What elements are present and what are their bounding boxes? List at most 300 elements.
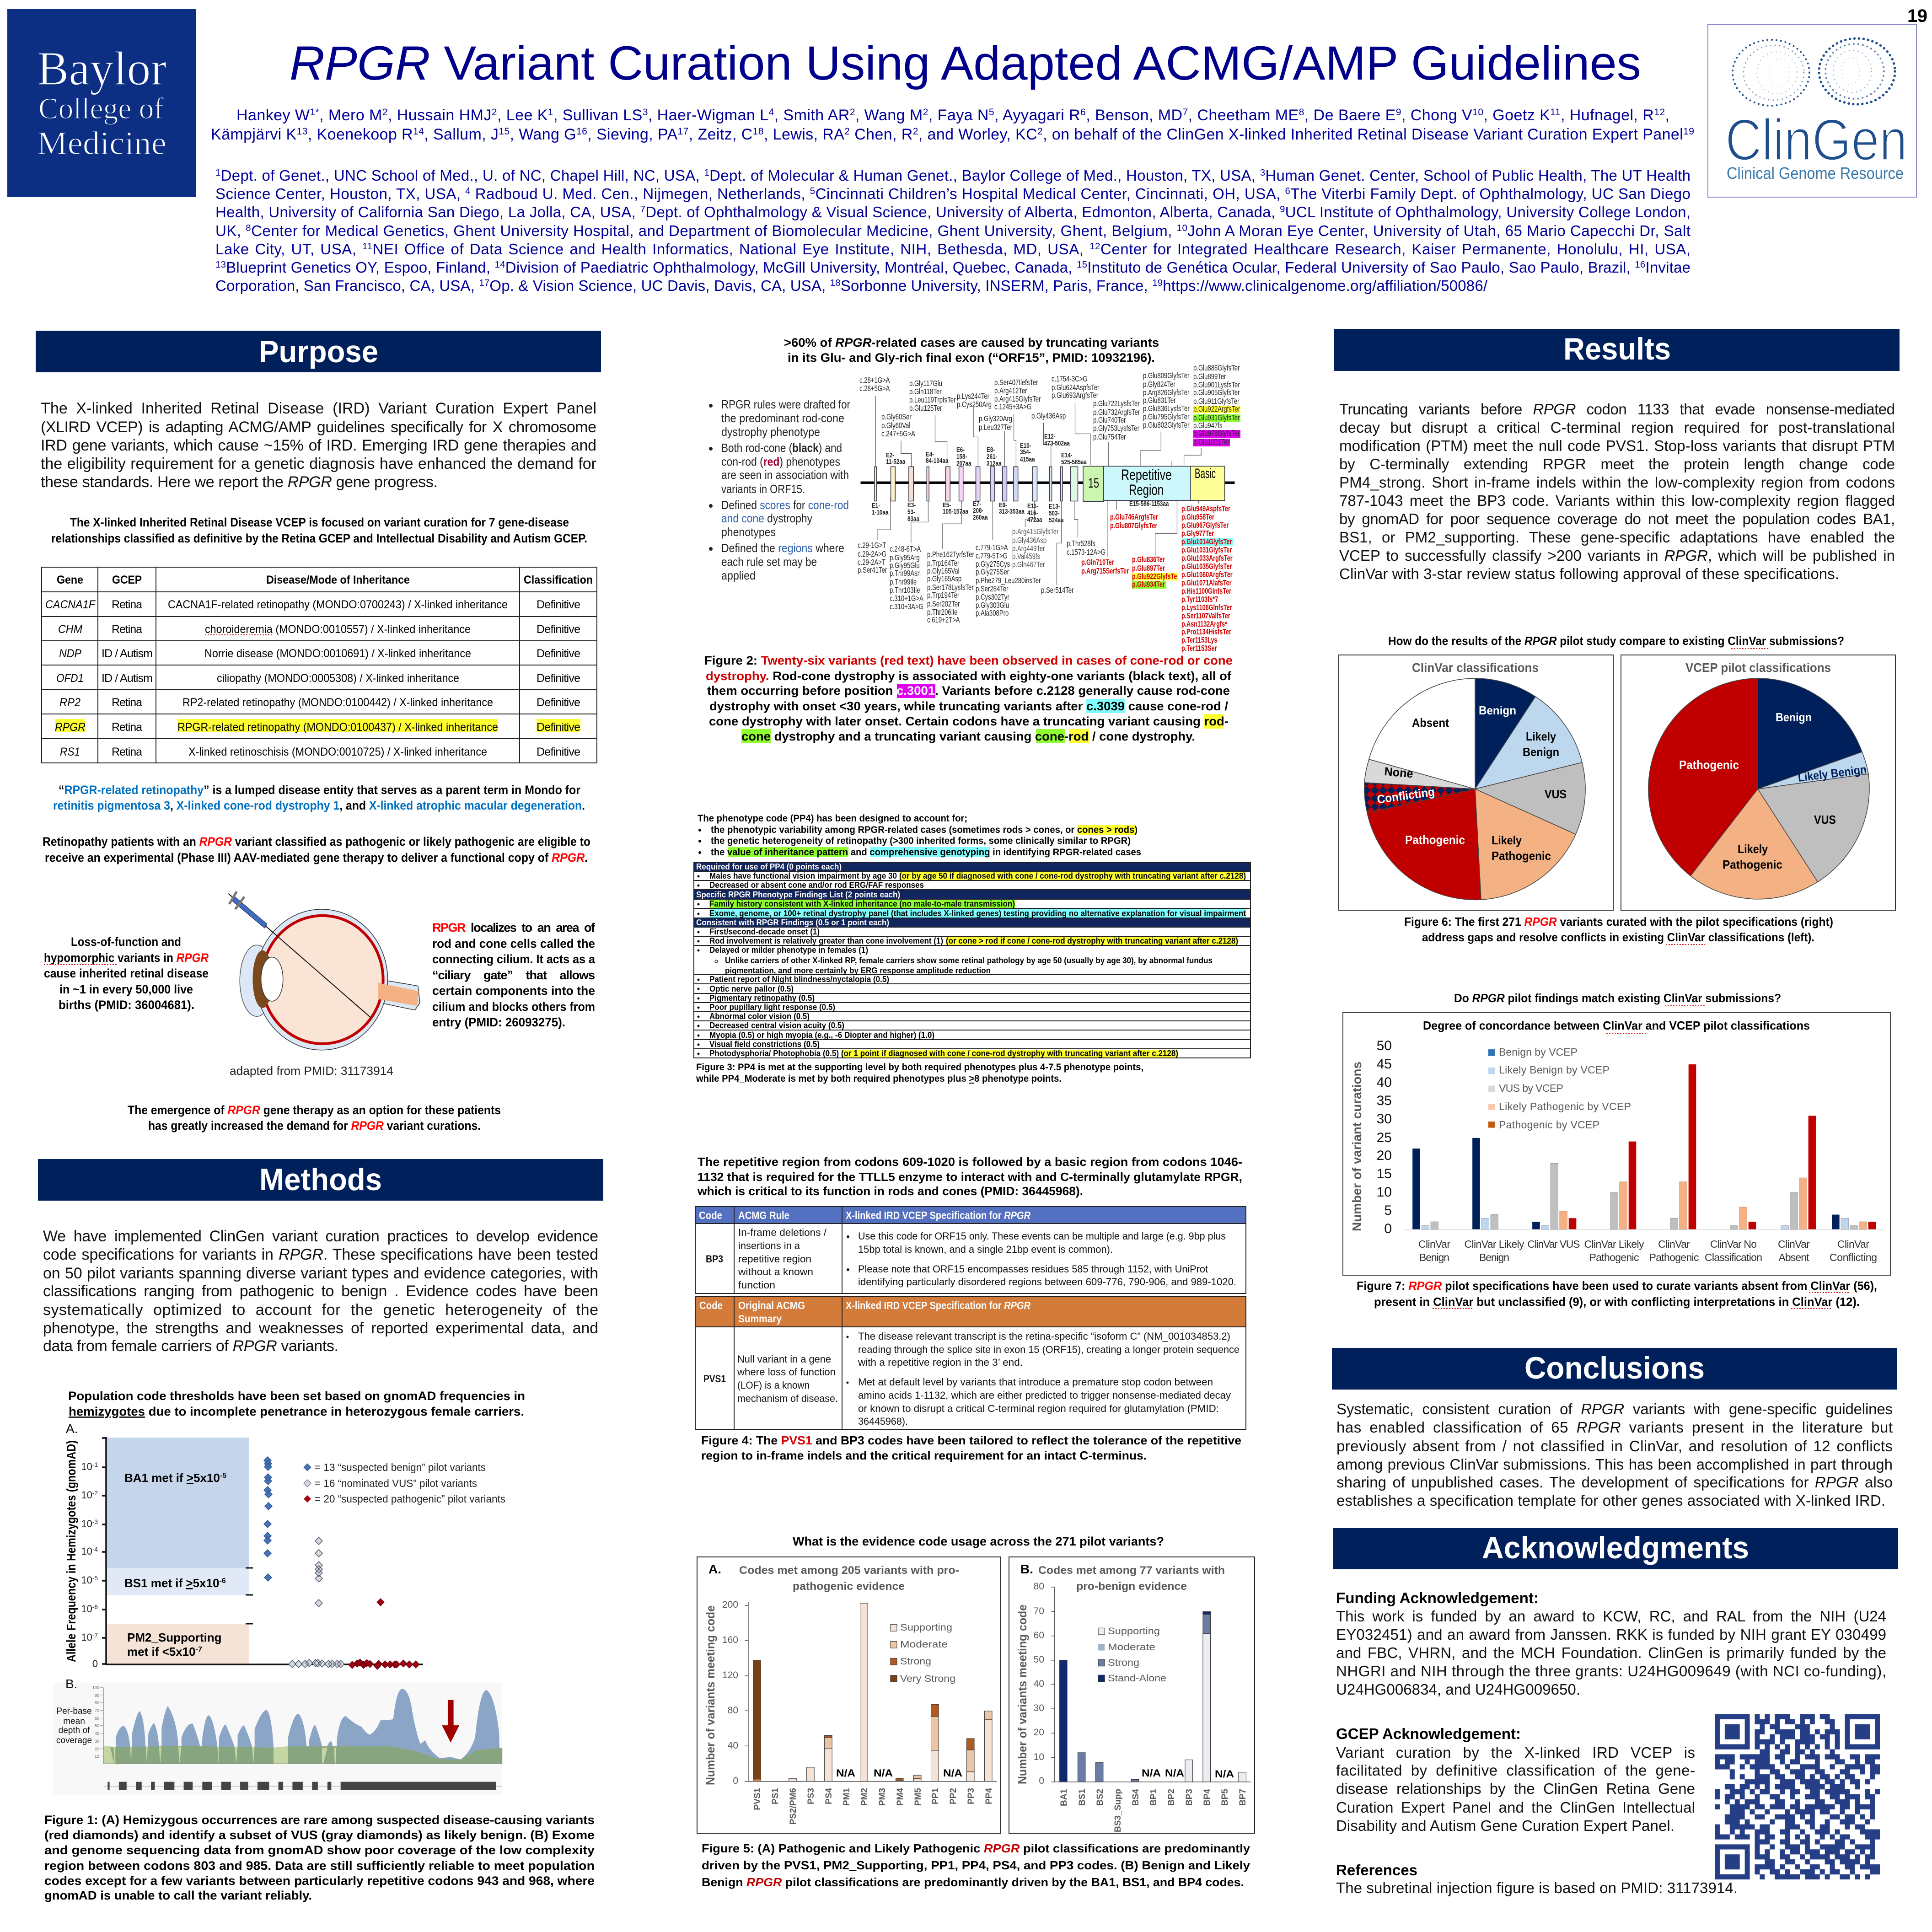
bullet list: RPGR rules: Defined the regions where bbox=[721, 541, 844, 555]
variant labels: cone-rod (red): p.Glu1014GlyfsTer bbox=[1181, 537, 1232, 547]
diagram: RPGR gene exon map bbox=[858, 364, 1240, 653]
references: References bbox=[1336, 1862, 1417, 1878]
bar chart: concordance: Benign bbox=[1419, 1251, 1449, 1263]
table: BP3 specification: insertions in a bbox=[738, 1240, 800, 1251]
chart A: pro-pathogenic codes: PS3 bbox=[806, 1788, 816, 1804]
chart B: pro-benign codes: 70 bbox=[1034, 1606, 1044, 1616]
methods paragraph: We have implemented ClinGen variant curation practices to develop evidence bbox=[43, 1228, 598, 1245]
variant labels: rod-cone: p.Thr206Ile bbox=[927, 608, 958, 617]
text: RPGR localization: RPGR localizes to an area of bbox=[432, 921, 596, 934]
chart A: pro-pathogenic codes: Supporting bbox=[900, 1622, 952, 1633]
variant labels: rod-cone: p.Trp194Ter bbox=[927, 591, 959, 600]
table: gene-disease relationships: RS1 bbox=[60, 746, 80, 758]
chart: per-base coverage: 20 bbox=[95, 1747, 99, 1751]
variant labels: rod-cone: p.Leu327Ter bbox=[979, 423, 1012, 432]
variant labels: rod-cone: p.Lys244Ter bbox=[957, 392, 989, 401]
population thresholds heading: hemizygotes due to incomplete penetrance in heterozygous female carriers. bbox=[69, 1405, 524, 1418]
chart B: pro-benign codes: 0 bbox=[1039, 1776, 1044, 1786]
bar chart: concordance: Likely Pathogenic by VCEP bbox=[1499, 1100, 1631, 1112]
heading: Results: Results bbox=[1563, 332, 1671, 366]
table: PVS1 specification: Null variant in a gene bbox=[737, 1353, 831, 1365]
authors bbox=[211, 107, 1694, 143]
bullet list: RPGR rules: are seen in association with bbox=[721, 468, 849, 482]
caption: figure 2: Figure 2: Twenty-six variants (red text) have been observed in cases of cone-rod or cone bbox=[704, 654, 1233, 667]
caption: figure 6: Figure 6: The first 271 RPGR variants curated with the pilot specifications (right) bbox=[1404, 915, 1833, 928]
table: gene-disease relationships: Disease/Mode of Inheritance bbox=[266, 574, 410, 586]
caption: figure 1: region between codons 803 and 985. Data are still sufficiently reliable to meet population bbox=[44, 1859, 595, 1873]
variant labels: rod-cone: c.28+1G>A bbox=[859, 376, 890, 385]
affiliations: Lake City, UT, USA, 11NEI Office of Data Science and Health Informatics, National Eye Institute, NIH, Bethesda, MD, USA, 12Center for Integrated Healthcare Research, Kaiser Permanente, Honolulu, HI, USA, bbox=[215, 241, 1690, 258]
chart A: pro-pathogenic codes: PP1 bbox=[931, 1788, 940, 1804]
bar chart: concordance: Conflicting bbox=[1830, 1251, 1877, 1263]
chart: per-base coverage: 10 bbox=[95, 1754, 99, 1759]
caption: figure 5: Figure 5: (A) Pathogenic and Likely Pathogenic RPGR pilot classifications are predominantly bbox=[702, 1841, 1250, 1855]
table: gene-disease relationships: NDP bbox=[59, 647, 81, 660]
table: BP3 specification: function bbox=[738, 1279, 775, 1291]
table: PP4 phenotype points: Optic nerve pallor (0.5) bbox=[709, 984, 794, 993]
chart B: pro-benign codes: BP5 bbox=[1220, 1789, 1230, 1806]
table: PVS1 specification: Code bbox=[699, 1299, 723, 1311]
table: gene-disease relationships: ID / Autism bbox=[102, 647, 153, 660]
variant labels: rod-cone: p.Ser514Ter bbox=[1041, 586, 1074, 595]
variant labels: cone-rod (red): p.Glu949AspfsTer bbox=[1181, 504, 1230, 514]
chart A: pro-pathogenic codes: 160 bbox=[722, 1635, 738, 1645]
references bbox=[1336, 1862, 1738, 1896]
heading: Conclusions bbox=[1332, 1348, 1897, 1390]
table: gene-disease relationships: Definitive bbox=[537, 721, 580, 734]
chart A: pro-pathogenic codes: N/A bbox=[943, 1767, 962, 1779]
chart B: pro-benign codes: BP7 bbox=[1238, 1789, 1248, 1806]
table: PP4 phenotype points: Visual field constrictions (0.5) bbox=[709, 1040, 820, 1049]
heading: Results bbox=[1334, 329, 1900, 371]
table: PP4 phenotype points: Patient report of Night blindness/nyctalopia (0.5) bbox=[709, 975, 889, 984]
variant labels: cone-rod (red): p.Glu1033ArgfsTer bbox=[1181, 554, 1233, 563]
panel: purpose bbox=[36, 331, 601, 1132]
variant labels: cone-rod (red): p.Glu807GlyfsTer bbox=[1110, 521, 1157, 531]
table: gene-disease relationships: RP2 bbox=[59, 696, 80, 709]
variant labels: rod-cone: p.Glu795GlyfsTer bbox=[1143, 413, 1189, 422]
table: gene-disease relationships: Definitive bbox=[537, 746, 580, 758]
purpose paragraph: IRD gene variants, which cause ~15% of IRD. Emerging IRD gene therapies and bbox=[41, 437, 596, 454]
table: gene-disease relationships: RPGR-related retinopathy (MONDO:0100437) / X-linked inheritance bbox=[177, 721, 498, 734]
chart B: pro-benign codes: BS4 bbox=[1131, 1789, 1141, 1806]
methods paragraph: data from female carriers of RPGR variants. bbox=[43, 1337, 338, 1355]
variant labels: rod-cone: p.Cys250Arg bbox=[957, 400, 992, 409]
conclusions paragraph: has enabled classification of 65 RPGR variants present in the literature but bbox=[1336, 1419, 1893, 1436]
chart B: pro-benign codes: Strong bbox=[1108, 1658, 1139, 1668]
diagram: RPGR gene exon map: 15 bbox=[1088, 476, 1099, 491]
table: PP4 phenotype points: First/second-decade onset (1) bbox=[709, 927, 820, 936]
variant labels: rod-cone: c.28+5G>A bbox=[859, 384, 890, 393]
variant labels: cone-rod (red): p.Gly977Ter bbox=[1181, 529, 1214, 538]
table: PP4 phenotype points: Myopia (0.5) or high myopia (e.g., -6 Diopter and higher) (1.0) bbox=[709, 1030, 934, 1040]
caption: figure 3: while PP4_Moderate is met by both required phenotypes plus >8 phenotype points. bbox=[696, 1073, 1062, 1084]
diagram: RPGR gene exon map: E5- bbox=[943, 501, 951, 509]
pie chart: ClinVar classifications: Benign bbox=[1479, 703, 1516, 717]
table: gene-disease relationships: Retina bbox=[112, 598, 142, 611]
diagram: RPGR gene exon map: 207aa bbox=[956, 460, 971, 467]
table: gene-disease relationships: Retina bbox=[112, 721, 142, 734]
table: PVS1 specification: X-linked IRD VCEP Specification for RPGR bbox=[846, 1299, 1030, 1311]
caption: figure 2: cone dystrophy and a truncating variant causing cone-rod / cone dystrophy. bbox=[741, 730, 1195, 743]
purpose paragraph: these standards. Here we report the RPGR gene progress. bbox=[41, 473, 438, 491]
variant labels: rod-cone: p.Phe279_Leu280insTer bbox=[976, 576, 1041, 585]
table: PVS1 specification: with a repetitive region in the 3’ end. bbox=[858, 1357, 1023, 1368]
text: loss-of-function prevalence bbox=[44, 935, 209, 1012]
variant labels: rod-cone: p.Thr99Ile bbox=[890, 578, 917, 587]
diagram: RPGR gene exon map: E10- bbox=[1020, 442, 1031, 449]
heading: Acknowledgments: Acknowledgments bbox=[1482, 1530, 1749, 1565]
diagram: RPGR gene exon map: 105-157aa bbox=[943, 508, 968, 515]
table: PP4 phenotype points: Unlike carriers of other X-linked RP, female carriers show some retinal pathology by age 50 (usually by age 30), by abnormal fundus bbox=[725, 956, 1213, 965]
variant labels: rod-cone: c.29-2A>T bbox=[858, 558, 886, 567]
bar chart: concordance: 20 bbox=[1377, 1148, 1392, 1163]
affiliations: Corporation, San Francisco, CA, USA, 17Op. & Vision Science, UC Davis, Davis, CA, USA, 18Sorbonne University, INSERM, Paris, France, 19https://www.clinicalgenome.org/affiliation/50086/ bbox=[215, 277, 1488, 294]
chart A: pro-pathogenic codes: PM3 bbox=[878, 1788, 887, 1806]
variant labels: rod-cone: c.248-6T>A bbox=[890, 545, 921, 554]
GCEP acknowledgement: Curation Expert Panel and the ClinGen Intellectual bbox=[1336, 1799, 1695, 1816]
diagram: RPGR gene exon map: E4- bbox=[926, 451, 934, 458]
diagram: RPGR gene exon map: 354- bbox=[1020, 448, 1030, 456]
table: PP4 phenotype points: Family history consistent with X-linked inheritance (no male-to-male transmission) bbox=[709, 899, 1015, 908]
table: PVS1 specification: mechanism of disease. bbox=[737, 1393, 838, 1404]
table: PP4 phenotype points: Decreased central vision acuity (0.5) bbox=[709, 1021, 844, 1030]
text: RPGR localization bbox=[432, 921, 596, 1029]
chart: allele frequency thresholds: 0 bbox=[92, 1658, 98, 1669]
conclusions paragraph: establishes a specification template for other genes associated with X-linked IRD. bbox=[1336, 1492, 1885, 1509]
logo: Baylor College of Medicine: College of bbox=[38, 92, 164, 125]
table: BP3 specification: repetitive region bbox=[738, 1253, 811, 1265]
table: gene-disease relationships: GCEP bbox=[112, 574, 142, 586]
conclusions paragraph bbox=[1336, 1401, 1893, 1509]
diagram: RPGR gene exon map: 473-502aa bbox=[1044, 440, 1070, 447]
variant labels: rod-cone: p.Ser284Ter bbox=[976, 585, 1009, 594]
caption: figure 4: region to in-frame indels and the critical requirement for an intact C-terminus. bbox=[701, 1449, 1147, 1462]
pie chart: VCEP pilot classifications: Likely Benign bbox=[1797, 762, 1868, 784]
pie chart: ClinVar classifications: Benign bbox=[1523, 745, 1559, 759]
chart A: pro-pathogenic codes: Strong bbox=[900, 1656, 931, 1667]
GCEP acknowledgement bbox=[1336, 1725, 1695, 1834]
variant labels: rod-cone: p.Glu836LysfsTer bbox=[1143, 404, 1190, 413]
heading: Methods bbox=[38, 1159, 603, 1201]
variant labels: rod-cone: c.1245+3A>G bbox=[994, 402, 1031, 412]
variant labels: rod-cone: p.Glu740Ter bbox=[1093, 416, 1126, 425]
table: PP4 phenotype points: Rod involvement is relatively greater than cone involvement (1) bbox=[709, 936, 943, 945]
caption: figure 2: dystrophy with onset <30 years, while truncating variants after c.3039 cause cone-rod / bbox=[709, 699, 1228, 713]
caption: figure 6: address gaps and resolve conflicts in existing ClinVar classifications (left). bbox=[1422, 930, 1814, 944]
variant labels: rod-cone: c.779-5T>G bbox=[976, 552, 1008, 561]
bar chart: concordance: ClinVar Likely bbox=[1465, 1238, 1524, 1250]
bar chart: concordance: Pathogenic bbox=[1589, 1251, 1639, 1263]
gene therapy demand note bbox=[128, 1103, 501, 1132]
table: PVS1 specification: where loss of function bbox=[737, 1366, 836, 1378]
variant labels: cone-rod (red): p.Lys1106GlnfsTer bbox=[1181, 603, 1232, 612]
panel: results bbox=[1334, 329, 1900, 1309]
purpose paragraph: (XLIRD VCEP) is adapting ACMG/AMP guidelines specifically for X chromosome bbox=[41, 419, 596, 436]
methods paragraph: code specifications for variants in RPGR. These specifications have been tested bbox=[43, 1246, 598, 1263]
variant labels: rod-cone: p.Arg826GlyfsTer bbox=[1143, 388, 1189, 397]
chart: allele frequency thresholds: 10-5 bbox=[81, 1574, 98, 1586]
GCEP acknowledgement: Variant curation by the X-linked IRD VCEP is bbox=[1336, 1744, 1695, 1761]
table: gene-disease relationships: Retina bbox=[112, 696, 142, 709]
purpose paragraph: the eligibility requirement for a genetic diagnosis have enhanced the demand for bbox=[41, 455, 596, 472]
chart B: pro-benign codes: 40 bbox=[1034, 1679, 1044, 1689]
variant labels: rod-cone: c.1573-12A>G bbox=[1067, 548, 1106, 557]
variant labels: rod-cone: p.Ser202Ter bbox=[927, 600, 960, 609]
table: PP4 phenotype points: Consistent with RPGR Findings (0.5 or 1 point each) bbox=[696, 918, 889, 927]
variant labels: rod-cone: c.1754-3C>G bbox=[1052, 375, 1087, 384]
bar chart: concordance: 40 bbox=[1377, 1075, 1392, 1090]
bar chart: concordance: Classification bbox=[1705, 1251, 1762, 1263]
table: gene-disease relationships: choroideremia (MONDO:0010557) / X-linked inheritance bbox=[205, 623, 471, 636]
variant highlights bbox=[1132, 406, 1240, 589]
bar chart: concordance: ClinVar bbox=[1658, 1238, 1690, 1250]
bullet list: RPGR rules: and cone dystrophy bbox=[721, 511, 812, 525]
variant labels: rod-cone: p.Gly117Glu bbox=[909, 379, 942, 388]
variant labels: rod-cone: p.Glu886GlyfsTer bbox=[1193, 364, 1240, 373]
repetitive region intro: The repetitive region from codons 609-1020 is followed by a basic region from codons 1046- bbox=[698, 1155, 1242, 1169]
table: PVS1 specification: reading through the splice site in exon 15 (ORF15), creating a longer protein sequence bbox=[858, 1344, 1240, 1355]
bullet list: RPGR rules: phenotypes bbox=[721, 525, 776, 539]
diagram: RPGR gene exon map: 524aa bbox=[1049, 516, 1064, 524]
GCEP acknowledgement: GCEP Acknowledgement: bbox=[1336, 1725, 1521, 1742]
pie chart: VCEP pilot classifications: Likely bbox=[1738, 842, 1768, 856]
variant labels: rod-cone: c.310+3A>G bbox=[890, 602, 923, 612]
variant labels: rod-cone: p.Gly275Ser bbox=[976, 568, 1009, 577]
logo: Baylor College of Medicine bbox=[7, 9, 196, 197]
table: BP3 specification: identifying particularly disordered regions between 609-776, 790-906, and 989-1020. bbox=[858, 1276, 1236, 1288]
bar chart: concordance: Absent bbox=[1778, 1251, 1809, 1263]
chart A: pro-pathogenic codes: 120 bbox=[722, 1670, 738, 1680]
chart: per-base coverage: 40 bbox=[95, 1731, 99, 1736]
bar chart: concordance: 30 bbox=[1377, 1111, 1392, 1127]
conclusions paragraph: sharing of unpublished cases. The development of specifications for RPGR also bbox=[1336, 1474, 1893, 1491]
table: gene-disease relationships: ciliopathy (MONDO:0005308) / X-linked inheritance bbox=[217, 672, 459, 685]
table: gene-disease relationships: CACNA1F-related retinopathy (MONDO:0700243) / X-linked inheritance bbox=[168, 598, 508, 611]
VCEP focus statement: relationships classified as definitive by the Retina GCEP and Intellectual Disability and Autism GCEP. bbox=[51, 531, 587, 545]
variant labels: cone-rod (red): p.Glu1031GlyfsTer bbox=[1181, 546, 1232, 555]
chart B: pro-benign codes: BS2 bbox=[1095, 1789, 1105, 1806]
text: RPGR localization: certain components into the bbox=[432, 984, 595, 998]
caption: figure 4: Figure 4: The PVS1 and BP3 codes have been tailored to reflect the tolerance of the repetitive bbox=[701, 1433, 1241, 1447]
caption: figure 1: and genome sequencing data from gnomAD show poor coverage of the low complexity bbox=[44, 1843, 595, 1857]
text: RPGR localization: cilium and blocks others from bbox=[432, 1000, 595, 1014]
variant labels: rod-cone: p.Glu831Ter bbox=[1143, 396, 1176, 405]
variant labels: rod-cone: c.29-2A>G bbox=[858, 550, 886, 559]
results paragraph: 787-1043 meet the BP3 code. Variants within this low-complexity region flagged bbox=[1339, 492, 1895, 509]
table: BP3 specification: In-frame deletions / bbox=[738, 1227, 827, 1238]
variant labels: cone-rod (red): p.Ser1107ValfsTer bbox=[1181, 612, 1230, 621]
text: loss-of-function prevalence: in ~1 in every 50,000 live bbox=[59, 982, 193, 996]
chart: allele frequency thresholds: 10-7 bbox=[81, 1631, 98, 1643]
pie chart: ClinVar classifications: Likely bbox=[1492, 833, 1522, 847]
diagram: RPGR gene exon map: 503- bbox=[1049, 510, 1059, 517]
table: gene-disease relationships: Definitive bbox=[537, 598, 580, 611]
pie chart: VCEP pilot classifications bbox=[1621, 655, 1895, 910]
chart A: pro-pathogenic codes: PS1 bbox=[771, 1788, 780, 1804]
variant labels: cone-rod (red): p.Ter1153Ser bbox=[1181, 644, 1217, 653]
figure: eye with subretinal injection bbox=[228, 891, 420, 1050]
results paragraph: BS1, or PM2_supporting. These gene-specific adaptations have enabled the bbox=[1339, 529, 1895, 546]
variant labels: rod-cone: p.Gly165Val bbox=[927, 567, 960, 576]
diagram: RPGR gene exon map: 416- bbox=[1027, 509, 1038, 516]
chart: allele frequency thresholds: 10-1 bbox=[81, 1461, 98, 1472]
chart A: pro-pathogenic codes: pathogenic evidence bbox=[793, 1580, 905, 1593]
variant labels: cone-rod (red): p.Glu967GlyfsTer bbox=[1181, 521, 1229, 530]
table: gene-disease relationships: Gene bbox=[57, 574, 83, 586]
bullet list: RPGR rules: each rule set may be bbox=[721, 555, 817, 569]
pie chart: ClinVar classifications: VUS bbox=[1545, 787, 1567, 801]
table: BP3 specification: Please note that ORF15 encompasses residues 585 through 1152, with UniProt bbox=[858, 1263, 1208, 1275]
chart B: pro-benign codes: Moderate bbox=[1108, 1642, 1155, 1653]
pie chart: ClinVar classifications: Pathogenic bbox=[1405, 833, 1465, 847]
variant labels: rod-cone: p.Gly436Asp bbox=[1031, 412, 1066, 421]
chart: allele frequency thresholds: BS1 met if >5x10-6 bbox=[124, 1576, 226, 1590]
variant labels: rod-cone: p.Thr99Asn bbox=[890, 569, 921, 578]
diagram: RPGR gene exon map: E8- bbox=[987, 446, 995, 453]
funding acknowledgement bbox=[1336, 1589, 1886, 1698]
caption: figure 1: gnomAD is unable to call the variant reliably. bbox=[44, 1889, 312, 1902]
variant labels: rod-cone: p.Glu911GlyfsTer bbox=[1193, 397, 1239, 406]
pie chart: ClinVar classifications: ClinVar classifications bbox=[1412, 660, 1539, 675]
funding acknowledgement: This work is funded by an award to KCW, RC, and RAL from the NIH (U24 bbox=[1336, 1608, 1886, 1625]
chart B: pro-benign codes: BP3 bbox=[1185, 1789, 1194, 1806]
chart B: pro-benign codes: 20 bbox=[1034, 1727, 1044, 1738]
diagram: RPGR gene exon map: 260aa bbox=[973, 514, 988, 521]
chart A: pro-pathogenic codes: Codes met among 205 variants with pro- bbox=[739, 1564, 959, 1577]
chart: per-base coverage: 80 bbox=[95, 1701, 99, 1705]
panel: conclusions bbox=[1332, 1348, 1897, 1509]
variant labels: rod-cone: p.Glu899Ter bbox=[1193, 372, 1226, 381]
variant labels: rod-cone: p.Glu732ArgfsTer bbox=[1093, 408, 1140, 417]
heading: Acknowledgments bbox=[1333, 1528, 1898, 1569]
eye figure credit: adapted from PMID: 31173914 bbox=[230, 1064, 393, 1078]
heading: evidence code usage: What is the evidence code usage across the 271 pilot variants? bbox=[793, 1535, 1164, 1548]
population thresholds heading bbox=[68, 1389, 525, 1418]
variant labels: rod-cone: p.Gly95Arg bbox=[890, 553, 920, 563]
table: BP3 specification: 15bp total is known, and a single 21bp event is common). bbox=[858, 1244, 1113, 1255]
affiliations: 1Dept. of Genet., UNC School of Med., U. of NC, Chapel Hill, NC, USA, 1Dept. of Molecular & Human Genet., Baylor College of Med., Houston, TX, USA, 3Human Genet. Center, School of Public Health, The UT Health bbox=[215, 167, 1690, 184]
caption: figure 2: them occurring before position c.3001. Variants before c.2128 generally cause rod-cone bbox=[707, 684, 1230, 698]
bullet list: RPGR rules: the predominant rod-cone bbox=[721, 411, 844, 425]
pie chart: VCEP pilot classifications: Pathogenic bbox=[1723, 858, 1782, 871]
heading: truncating variants: >60% of RPGR-related cases are caused by truncating variants bbox=[784, 336, 1159, 349]
chart: allele frequency thresholds: 10-2 bbox=[81, 1489, 98, 1501]
panel: truncating variants gene map bbox=[704, 336, 1240, 743]
variant labels: cone-rod (red): p.Glu836Ter bbox=[1132, 555, 1165, 564]
panel: evidence code usage bbox=[697, 1535, 1255, 1889]
diagram: RPGR gene exon map: 312aa bbox=[987, 460, 1002, 467]
variant labels: rod-cone: p.Gln118Ter bbox=[909, 387, 942, 397]
affiliations: Science Center, Houston, TX, USA, 4 Radboud U. Med. Cen., Nijmegen, Netherlands, 5Cincinnati Children’s Hospital Medical Center, Cincinnati, OH, USA, 6The Viterbi Family Dept. of Ophthalmology, UC San Diego bbox=[215, 185, 1690, 202]
table: gene-disease relationships: Norrie disease (MONDO:0010691) / X-linked inheritance bbox=[204, 647, 471, 660]
chart A: pro-pathogenic codes: PP3 bbox=[966, 1788, 976, 1804]
chart A: pro-pathogenic codes: PVS1 bbox=[753, 1788, 762, 1810]
chart B: pro-benign codes: 80 bbox=[1034, 1581, 1044, 1592]
diagram: RPGR gene exon map: E2- bbox=[886, 451, 894, 459]
question: pilot findings vs ClinVar: Do RPGR pilot findings match existing ClinVar submissions? bbox=[1454, 991, 1781, 1005]
variant labels: cone-rod (red): p.Tyr1103fs*7 bbox=[1181, 595, 1218, 604]
variant labels: rod-cone: p.Val459fs bbox=[1012, 552, 1040, 561]
variant labels: rod-cone: p.Gly275Cys bbox=[976, 560, 1010, 569]
chart A: pro-pathogenic codes: Number of variants meeting code bbox=[703, 1605, 717, 1785]
chart A: pro-pathogenic codes: PM1 bbox=[842, 1788, 852, 1806]
diagram: RPGR gene exon map: 525-585aa bbox=[1061, 458, 1087, 466]
caption: figure 1: (red diamonds) and identify a subset of VUS (gray diamonds) as likely benign. (B) Exome bbox=[44, 1828, 595, 1842]
chart: allele frequency thresholds: 10-3 bbox=[81, 1518, 98, 1530]
table: gene-disease relationships: CHM bbox=[58, 623, 82, 636]
chart: per-base coverage: mean bbox=[63, 1717, 85, 1726]
chart B: pro-benign codes: 30 bbox=[1034, 1703, 1044, 1713]
pie chart: ClinVar classifications: Pathogenic bbox=[1492, 849, 1551, 863]
table: PP4 phenotype points: Poor pupillary light response (0.5) bbox=[709, 1003, 835, 1012]
chart B: pro-benign codes: BA1 bbox=[1059, 1789, 1069, 1806]
methods paragraph: classifications ranging from pathogenic to benign . Evidence codes have been bbox=[43, 1283, 598, 1300]
chart B: pro-benign codes: N/A bbox=[1215, 1768, 1234, 1780]
chart B: pro-benign codes: BS3_Supp bbox=[1113, 1789, 1123, 1832]
table: PP4 phenotype points: Males have functional vision impairment by age 30 bbox=[709, 871, 897, 880]
results paragraph: ClinVar with 3-star review status following approval of these specifications. bbox=[1339, 565, 1839, 582]
pie chart: ClinVar classifications: Likely bbox=[1526, 730, 1556, 743]
bullet list: RPGR rules bbox=[709, 397, 850, 582]
table: PP4 phenotype points: Specific RPGR Phenotype Findings List (2 points each) bbox=[696, 890, 900, 899]
panel: PVS1 and BP3 tables bbox=[695, 1155, 1246, 1462]
bar chart: concordance: Likely Benign by VCEP bbox=[1499, 1064, 1610, 1076]
variant labels: rod-cone: p.Glu693ArgfsTer bbox=[1052, 391, 1098, 400]
affiliations bbox=[215, 167, 1690, 294]
diagram: RPGR gene exon map: 158- bbox=[956, 453, 967, 460]
diagram: RPGR gene exon map: Basic bbox=[1195, 466, 1216, 481]
caption: figure 2: cone dystrophy with later onset. Certain codons have a truncating variant causing rod- bbox=[709, 714, 1229, 728]
results paragraph: by gnomAD for poor sequence coverage do not meet the population codes BA1, bbox=[1339, 510, 1895, 527]
variant labels: cone-rod (red): p.Ter1153Lys bbox=[1181, 636, 1217, 645]
results paragraph: PM4_strong. Short in-frame indels within the low-complexity region from codons bbox=[1339, 474, 1895, 491]
lumped disease entity note bbox=[53, 783, 585, 812]
PP4 intro text: the phenotypic variability among RPGR-related cases (sometimes rods > cones, or cones > rods) bbox=[711, 825, 1138, 835]
variant labels: rod-cone: p.Glu722LysfsTer bbox=[1093, 399, 1140, 408]
diagram: RPGR gene exon map: 261- bbox=[987, 453, 997, 460]
chart B: pro-benign codes: BP1 bbox=[1149, 1789, 1159, 1806]
variant labels: rod-cone: p.Gly95Glu bbox=[890, 561, 920, 570]
variant labels: rod-cone: p.Ser41Ter bbox=[858, 566, 887, 575]
chart: allele frequency thresholds: 10-4 bbox=[81, 1546, 98, 1557]
gene therapy eligibility note bbox=[43, 835, 590, 864]
text: loss-of-function prevalence: hypomorphic variants in RPGR bbox=[44, 951, 209, 965]
methods paragraph: phenotype, the strengths and weaknesses of reported experimental data, and bbox=[43, 1320, 598, 1337]
conclusions paragraph: previously absent from / not classified in ClinVar, and resolution of 12 conflicts bbox=[1336, 1438, 1893, 1454]
diagram: RPGR gene exon map: E11- bbox=[1027, 502, 1038, 510]
results paragraph: by C-terminally extending RPGR meet the protein length change code bbox=[1339, 456, 1895, 472]
variant labels: rod-cone: p.Ala308Pro bbox=[976, 609, 1009, 618]
diagram: RPGR gene exon map: E7- bbox=[973, 500, 981, 507]
bar chart: concordance bbox=[1343, 1013, 1890, 1275]
chart A: pro-pathogenic codes: PS4 bbox=[824, 1788, 834, 1804]
chart A: pro-pathogenic codes bbox=[697, 1557, 1001, 1833]
legend: pilot variant diamonds: = 20 “suspected pathogenic” pilot variants bbox=[315, 1493, 505, 1505]
chart A: pro-pathogenic codes: PM2 bbox=[860, 1788, 869, 1806]
caption: figure 5: Benign RPGR pilot classifications are predominantly driven by the BA1, BS1, and BP4 codes. bbox=[702, 1875, 1244, 1889]
funding acknowledgement: U24HG006834, and U24HG009650. bbox=[1336, 1681, 1580, 1698]
table: PVS1 specification: (LOF) is a known bbox=[737, 1379, 810, 1391]
chart A: pro-pathogenic codes: PM4 bbox=[896, 1788, 905, 1806]
GCEP acknowledgement: facilitated by definitive classification of the gene- bbox=[1336, 1762, 1695, 1779]
diagram: RPGR gene exon map: 53- bbox=[907, 508, 915, 515]
caption: figure 1: Figure 1: (A) Hemizygous occurrences are rare among suspected disease-causing variants bbox=[44, 1813, 595, 1827]
heading: Methods: Methods bbox=[259, 1162, 382, 1197]
variant labels: rod-cone: p.Glu624AspfsTer bbox=[1052, 383, 1099, 392]
variant labels: rod-cone: p.Phe162TyrfsTer bbox=[927, 550, 974, 559]
population thresholds heading: Population code thresholds have been set based on gnomAD frequencies in bbox=[68, 1389, 525, 1403]
